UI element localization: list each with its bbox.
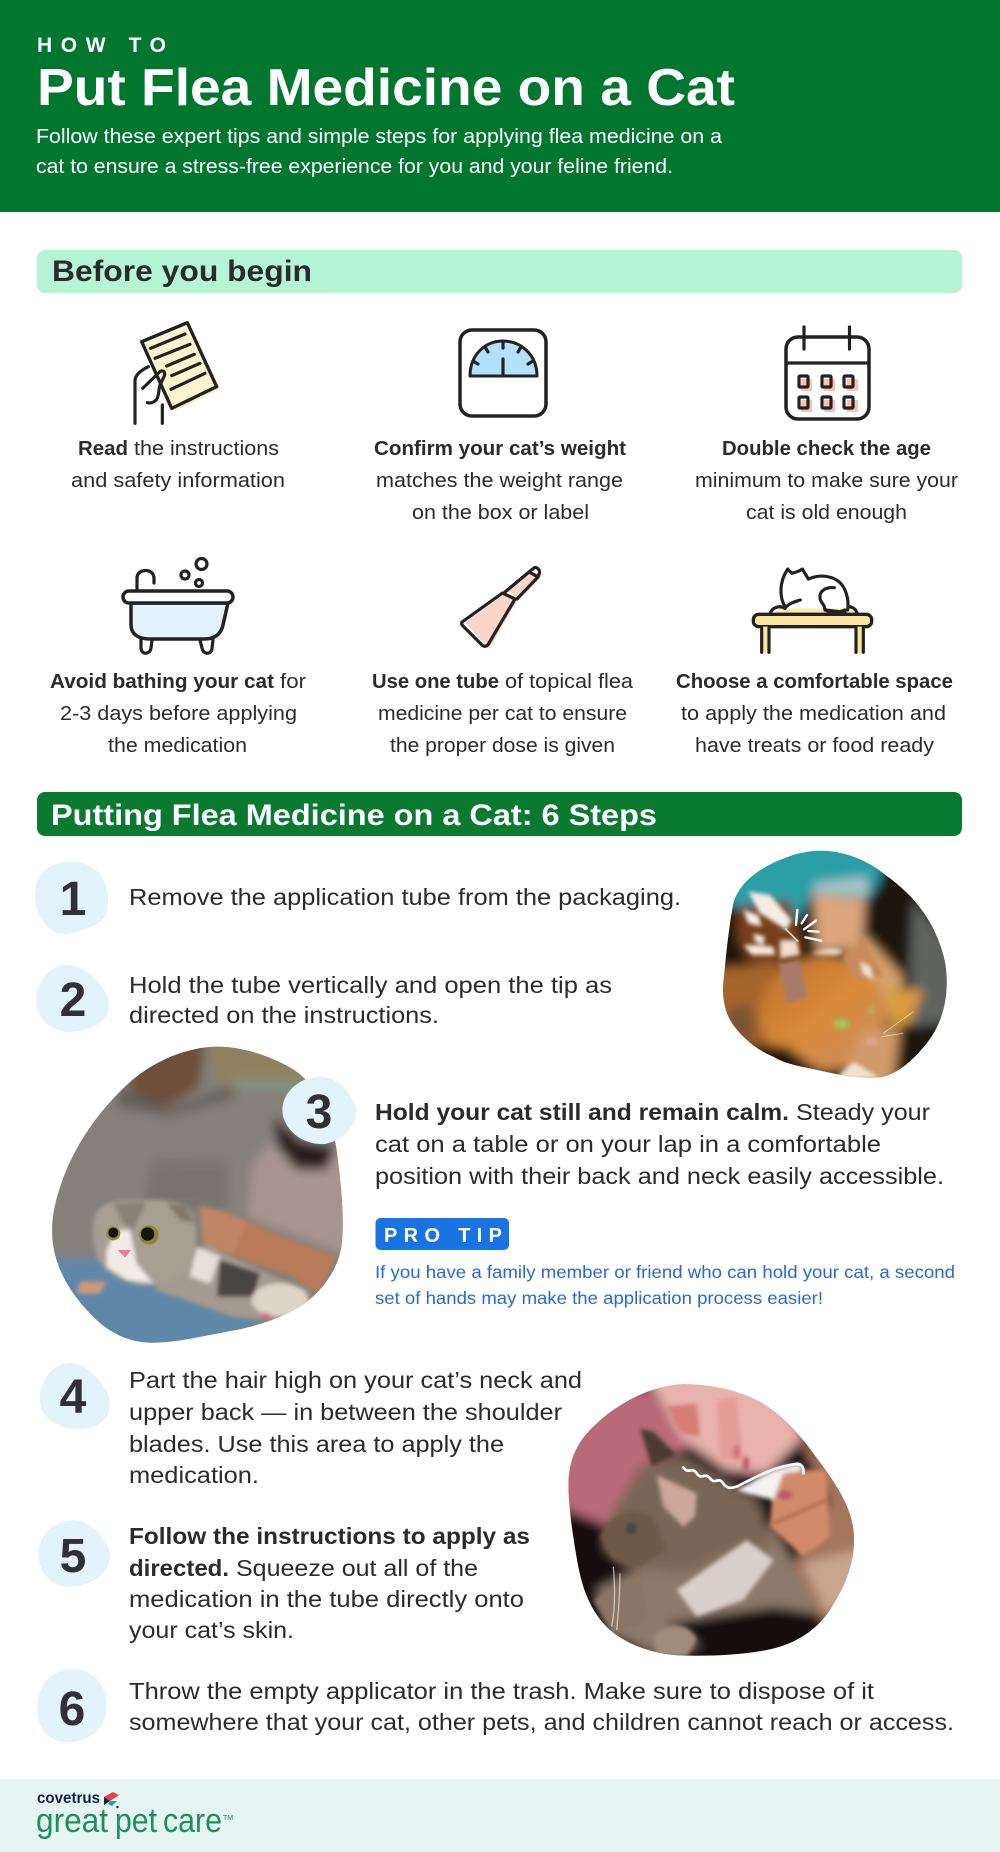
step 6: somewhere that your cat, other pets, and children cannot reach or access. — [129, 1709, 954, 1735]
step 2: Hold the tube vertically and open the tip as — [129, 972, 612, 998]
section heading: before you begin — [37, 250, 962, 293]
tip: read instructions: Read — [78, 438, 128, 460]
step 5: Follow the instructions to apply as — [129, 1523, 530, 1549]
logo: great pet care: TM — [223, 1815, 233, 1822]
number blob 1: 1 — [60, 873, 86, 926]
icon: cat on table — [753, 569, 872, 653]
number blob 5: 5 — [60, 1530, 86, 1583]
logo: great pet care — [36, 1802, 233, 1840]
section heading: 6 steps — [37, 792, 962, 836]
intro text: Follow these expert tips and simple steps for applying flea medicine on a — [36, 125, 723, 148]
number blob 1 — [35, 862, 108, 934]
step 5: Squeeze out all of the — [236, 1555, 478, 1581]
tip: read instructions: the instructions — [134, 438, 279, 460]
tip: comfortable space: to apply the medication and — [681, 703, 946, 725]
icon: calendar — [786, 327, 869, 419]
step 5: your cat’s skin. — [129, 1617, 294, 1643]
photo: person holding grey kitten on lap — [52, 1046, 343, 1343]
icon: medicine tube — [462, 568, 544, 648]
number blob 3 — [282, 1077, 356, 1144]
number blob 4: 4 — [60, 1371, 87, 1424]
eyebrow: how to: HOW TO — [37, 34, 166, 57]
step 4: upper back — in between the shoulder — [129, 1399, 562, 1425]
header banner — [0, 0, 1000, 212]
logo: great pet care: care — [163, 1802, 222, 1840]
step 2 — [36, 965, 612, 1032]
step 6 — [37, 1669, 954, 1742]
step 5 — [38, 1520, 530, 1643]
step 3: cat on a table or on your lap in a comfortable — [375, 1131, 881, 1157]
tip: avoid bathing: 2-3 days before applying — [60, 703, 297, 725]
intro text — [36, 125, 723, 178]
tip: avoid bathing: the medication — [108, 735, 247, 757]
tip: comfortable space — [676, 569, 953, 757]
icon: document in hand — [135, 323, 220, 423]
tip: one tube: of topical flea — [505, 671, 634, 693]
tip: confirm weight — [374, 330, 626, 524]
step 3: position with their back and neck easily accessible. — [375, 1163, 944, 1189]
step 4: Part the hair high on your cat’s neck and — [129, 1367, 582, 1393]
footer — [0, 1779, 1000, 1852]
step 4: blades. Use this area to apply the — [129, 1431, 504, 1457]
step 4 — [40, 1363, 582, 1488]
tip: read instructions: and safety information — [71, 470, 285, 492]
number blob 3: 3 — [306, 1086, 332, 1139]
pro tip badge — [376, 1218, 509, 1250]
logo: great pet care: pet — [115, 1802, 157, 1840]
tip: confirm weight: Confirm your cat’s weight — [374, 438, 626, 460]
step 3: Steady your — [796, 1099, 930, 1125]
pro tip text — [375, 1262, 955, 1308]
pro tip — [375, 1218, 955, 1308]
step 6: Throw the empty applicator in the trash. Make sure to dispose of it — [129, 1678, 875, 1704]
step 5: directed. — [129, 1555, 229, 1581]
logo: covetrus: covetrus — [37, 1790, 100, 1807]
step 1: Remove the application tube from the packaging. — [129, 884, 681, 910]
number blob 5 — [38, 1520, 110, 1587]
tip: avoid bathing: Avoid bathing your cat — [50, 671, 274, 693]
number blob 2: 2 — [60, 974, 86, 1027]
tip: one tube: Use one tube — [372, 671, 499, 693]
number blob 2 — [36, 965, 109, 1032]
step 4: medication. — [129, 1462, 259, 1488]
title: Put Flea Medicine on a Cat — [37, 59, 735, 117]
tip: check the age: Double check the age — [722, 438, 931, 460]
intro text: cat to ensure a stress-free experience for you and your feline friend. — [36, 155, 673, 178]
icon: weighing scale — [460, 330, 546, 416]
tip: check the age: cat is old enough — [746, 502, 907, 524]
pro tip badge: PRO TIP — [384, 1225, 502, 1247]
photo: hands parting fur on tabby kitten — [568, 1384, 854, 1656]
tip: read instructions — [71, 323, 285, 492]
tip: comfortable space: have treats or food ready — [695, 735, 934, 757]
step 3 — [282, 1077, 944, 1189]
pro tip text: If you have a family member or friend who can hold your cat, a second — [375, 1262, 955, 1282]
step 5: medication in the tube directly onto — [129, 1586, 524, 1612]
section heading: before you begin: Before you begin — [52, 255, 312, 288]
tip: confirm weight: on the box or label — [412, 502, 589, 524]
tip: confirm weight: matches the weight range — [376, 470, 623, 492]
logo: great pet care: great — [36, 1802, 109, 1840]
number blob 4 — [40, 1363, 110, 1429]
number blob 6: 6 — [59, 1683, 85, 1736]
tip: one tube: medicine per cat to ensure — [378, 703, 627, 725]
tip: avoid bathing — [50, 558, 306, 757]
number blob 6 — [37, 1669, 106, 1742]
tip: avoid bathing: for — [280, 671, 306, 693]
step 1 — [35, 862, 681, 934]
step 2: directed on the instructions. — [129, 1002, 439, 1028]
tip: one tube: the proper dose is given — [390, 735, 615, 757]
pro tip text: set of hands may make the application process easier! — [375, 1288, 823, 1308]
section heading: 6 steps: Putting Flea Medicine on a Cat: 6 Steps — [51, 799, 657, 832]
tip: check the age — [695, 327, 958, 524]
tip: one tube — [372, 568, 634, 757]
step 3: Hold your cat still and remain calm. — [375, 1099, 789, 1125]
tip: check the age: minimum to make sure your — [695, 470, 958, 492]
photo: vet applying medicine to orange cat — [723, 850, 947, 1078]
icon: bathtub — [123, 558, 233, 653]
tip: comfortable space: Choose a comfortable space — [676, 671, 953, 693]
